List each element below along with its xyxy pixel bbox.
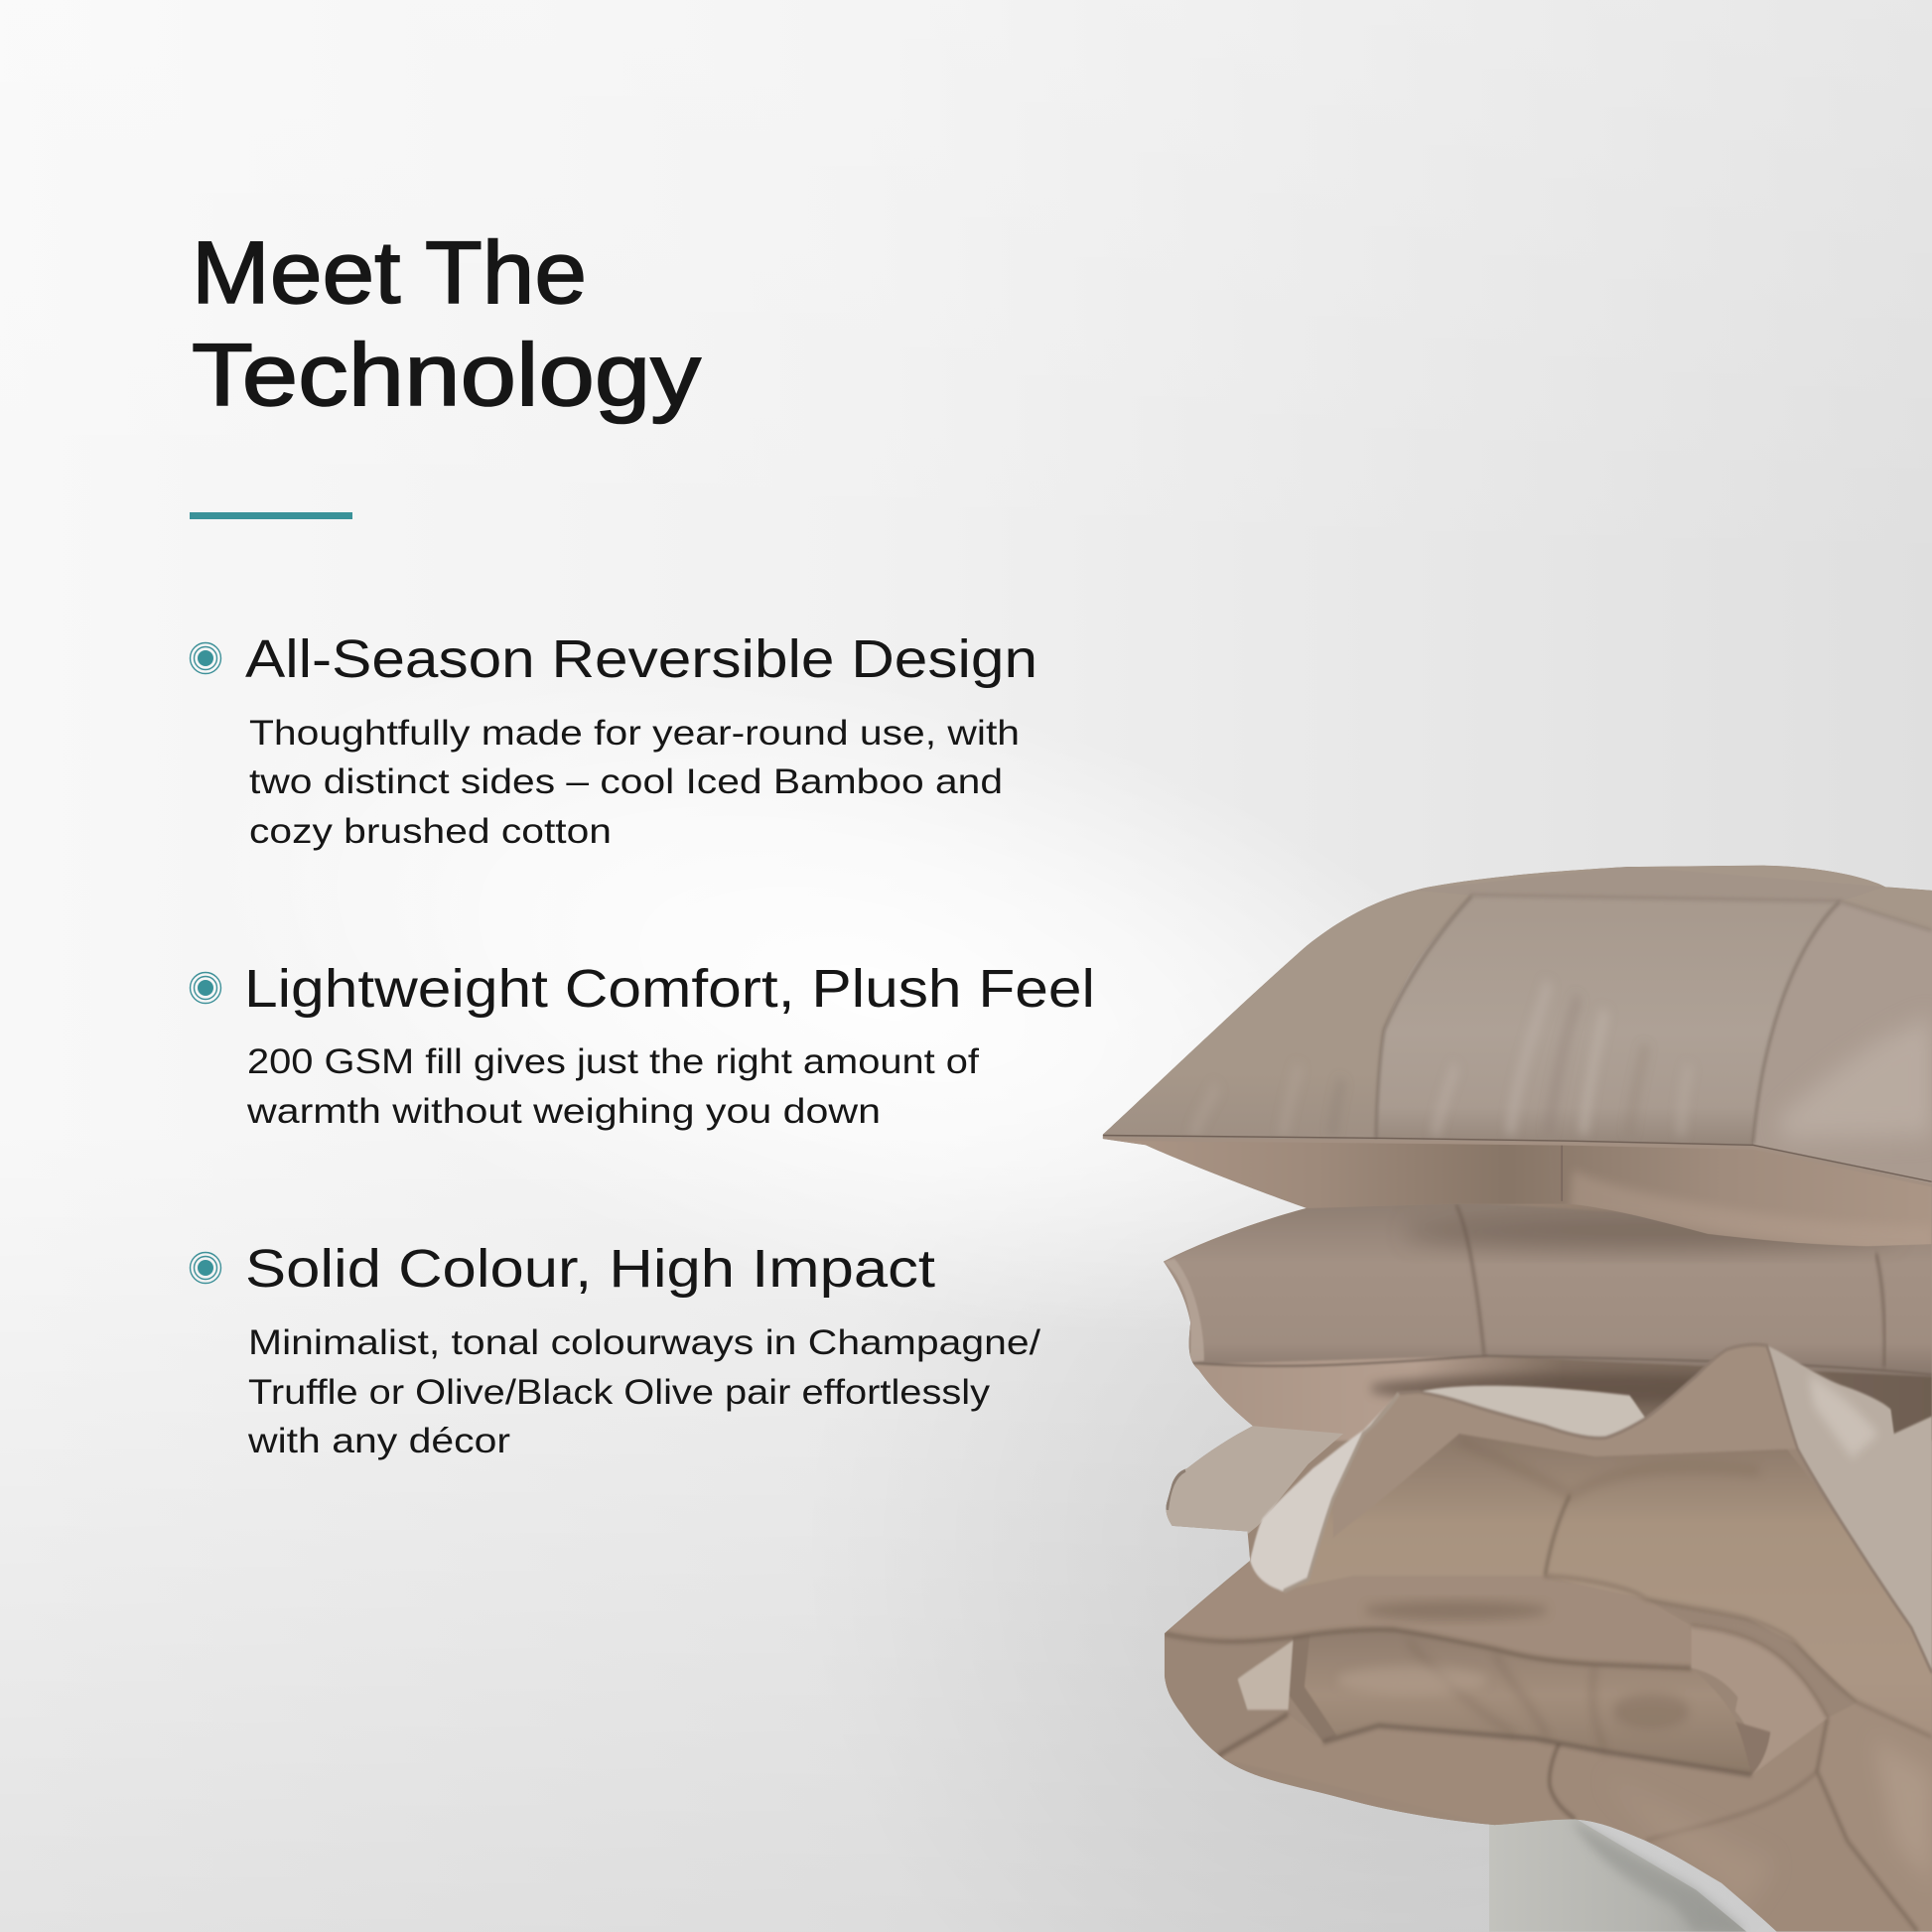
title: Technology	[192, 325, 702, 424]
piping seam	[1103, 1139, 1932, 1185]
description: with any décor	[247, 1422, 510, 1460]
heading: Lightweight Comfort, Plush Feel	[244, 959, 1095, 1019]
description	[246, 1042, 979, 1131]
upper roll band	[1495, 1643, 1600, 1660]
description: cozy brushed cotton	[249, 812, 612, 851]
description: Minimalist, tonal colourways in Champagne/	[248, 1323, 1040, 1362]
comforter and pillows silhouette	[1082, 844, 1932, 1932]
centre quilt panel	[1380, 958, 1795, 1110]
description: two distinct sides – cool Iced Bamboo and	[249, 762, 1003, 801]
title	[192, 222, 702, 424]
quilt seams	[1376, 896, 1472, 1139]
white reverse side	[1249, 1410, 1384, 1592]
description: Thoughtfully made for year-round use, with	[249, 714, 1020, 753]
right roll curl	[1692, 1626, 1828, 1775]
title: Meet The	[192, 222, 587, 322]
flap edge binding	[1399, 1344, 1932, 1673]
inner roll band	[1288, 1629, 1751, 1775]
description	[247, 1323, 1040, 1460]
top quilt panel	[1414, 867, 1885, 901]
right quilt panel	[1753, 1086, 1932, 1183]
icon: teal bullet	[191, 973, 220, 1003]
rolled comforter	[1137, 1344, 1932, 1932]
tan flap	[1342, 1349, 1794, 1486]
heading: All-Season Reversible Design	[245, 629, 1037, 689]
comforter quilt top	[1278, 1434, 1932, 1736]
icon: teal bullet	[191, 1253, 220, 1283]
feature: lightweight comfort	[191, 959, 1095, 1131]
description	[249, 714, 1020, 851]
right light reverse	[1766, 1345, 1932, 1670]
description: Truffle or Olive/Black Olive pair effortlessly	[248, 1373, 991, 1412]
title accent bar	[190, 512, 352, 519]
description: 200 GSM fill gives just the right amount of	[247, 1042, 979, 1081]
stone pedestal	[1489, 1815, 1746, 1932]
description: warmth without weighing you down	[246, 1092, 881, 1131]
lower pillow	[1164, 1201, 1932, 1441]
fabric wrinkles	[1433, 993, 1684, 1134]
product photo: stacked pillows and folded comforter	[1082, 844, 1932, 1932]
upper pillow	[1102, 866, 1932, 1247]
icon: teal bullet	[191, 643, 220, 673]
heading: Solid Colour, High Impact	[245, 1239, 935, 1299]
feature: solid colour	[191, 1239, 1040, 1460]
feature: all-season reversible design	[191, 629, 1037, 851]
third pillow corner	[1158, 1426, 1343, 1534]
light inner strip	[1418, 1386, 1646, 1438]
lower flap	[1116, 1141, 1932, 1246]
right fold below the quilt	[1830, 1708, 1886, 1737]
